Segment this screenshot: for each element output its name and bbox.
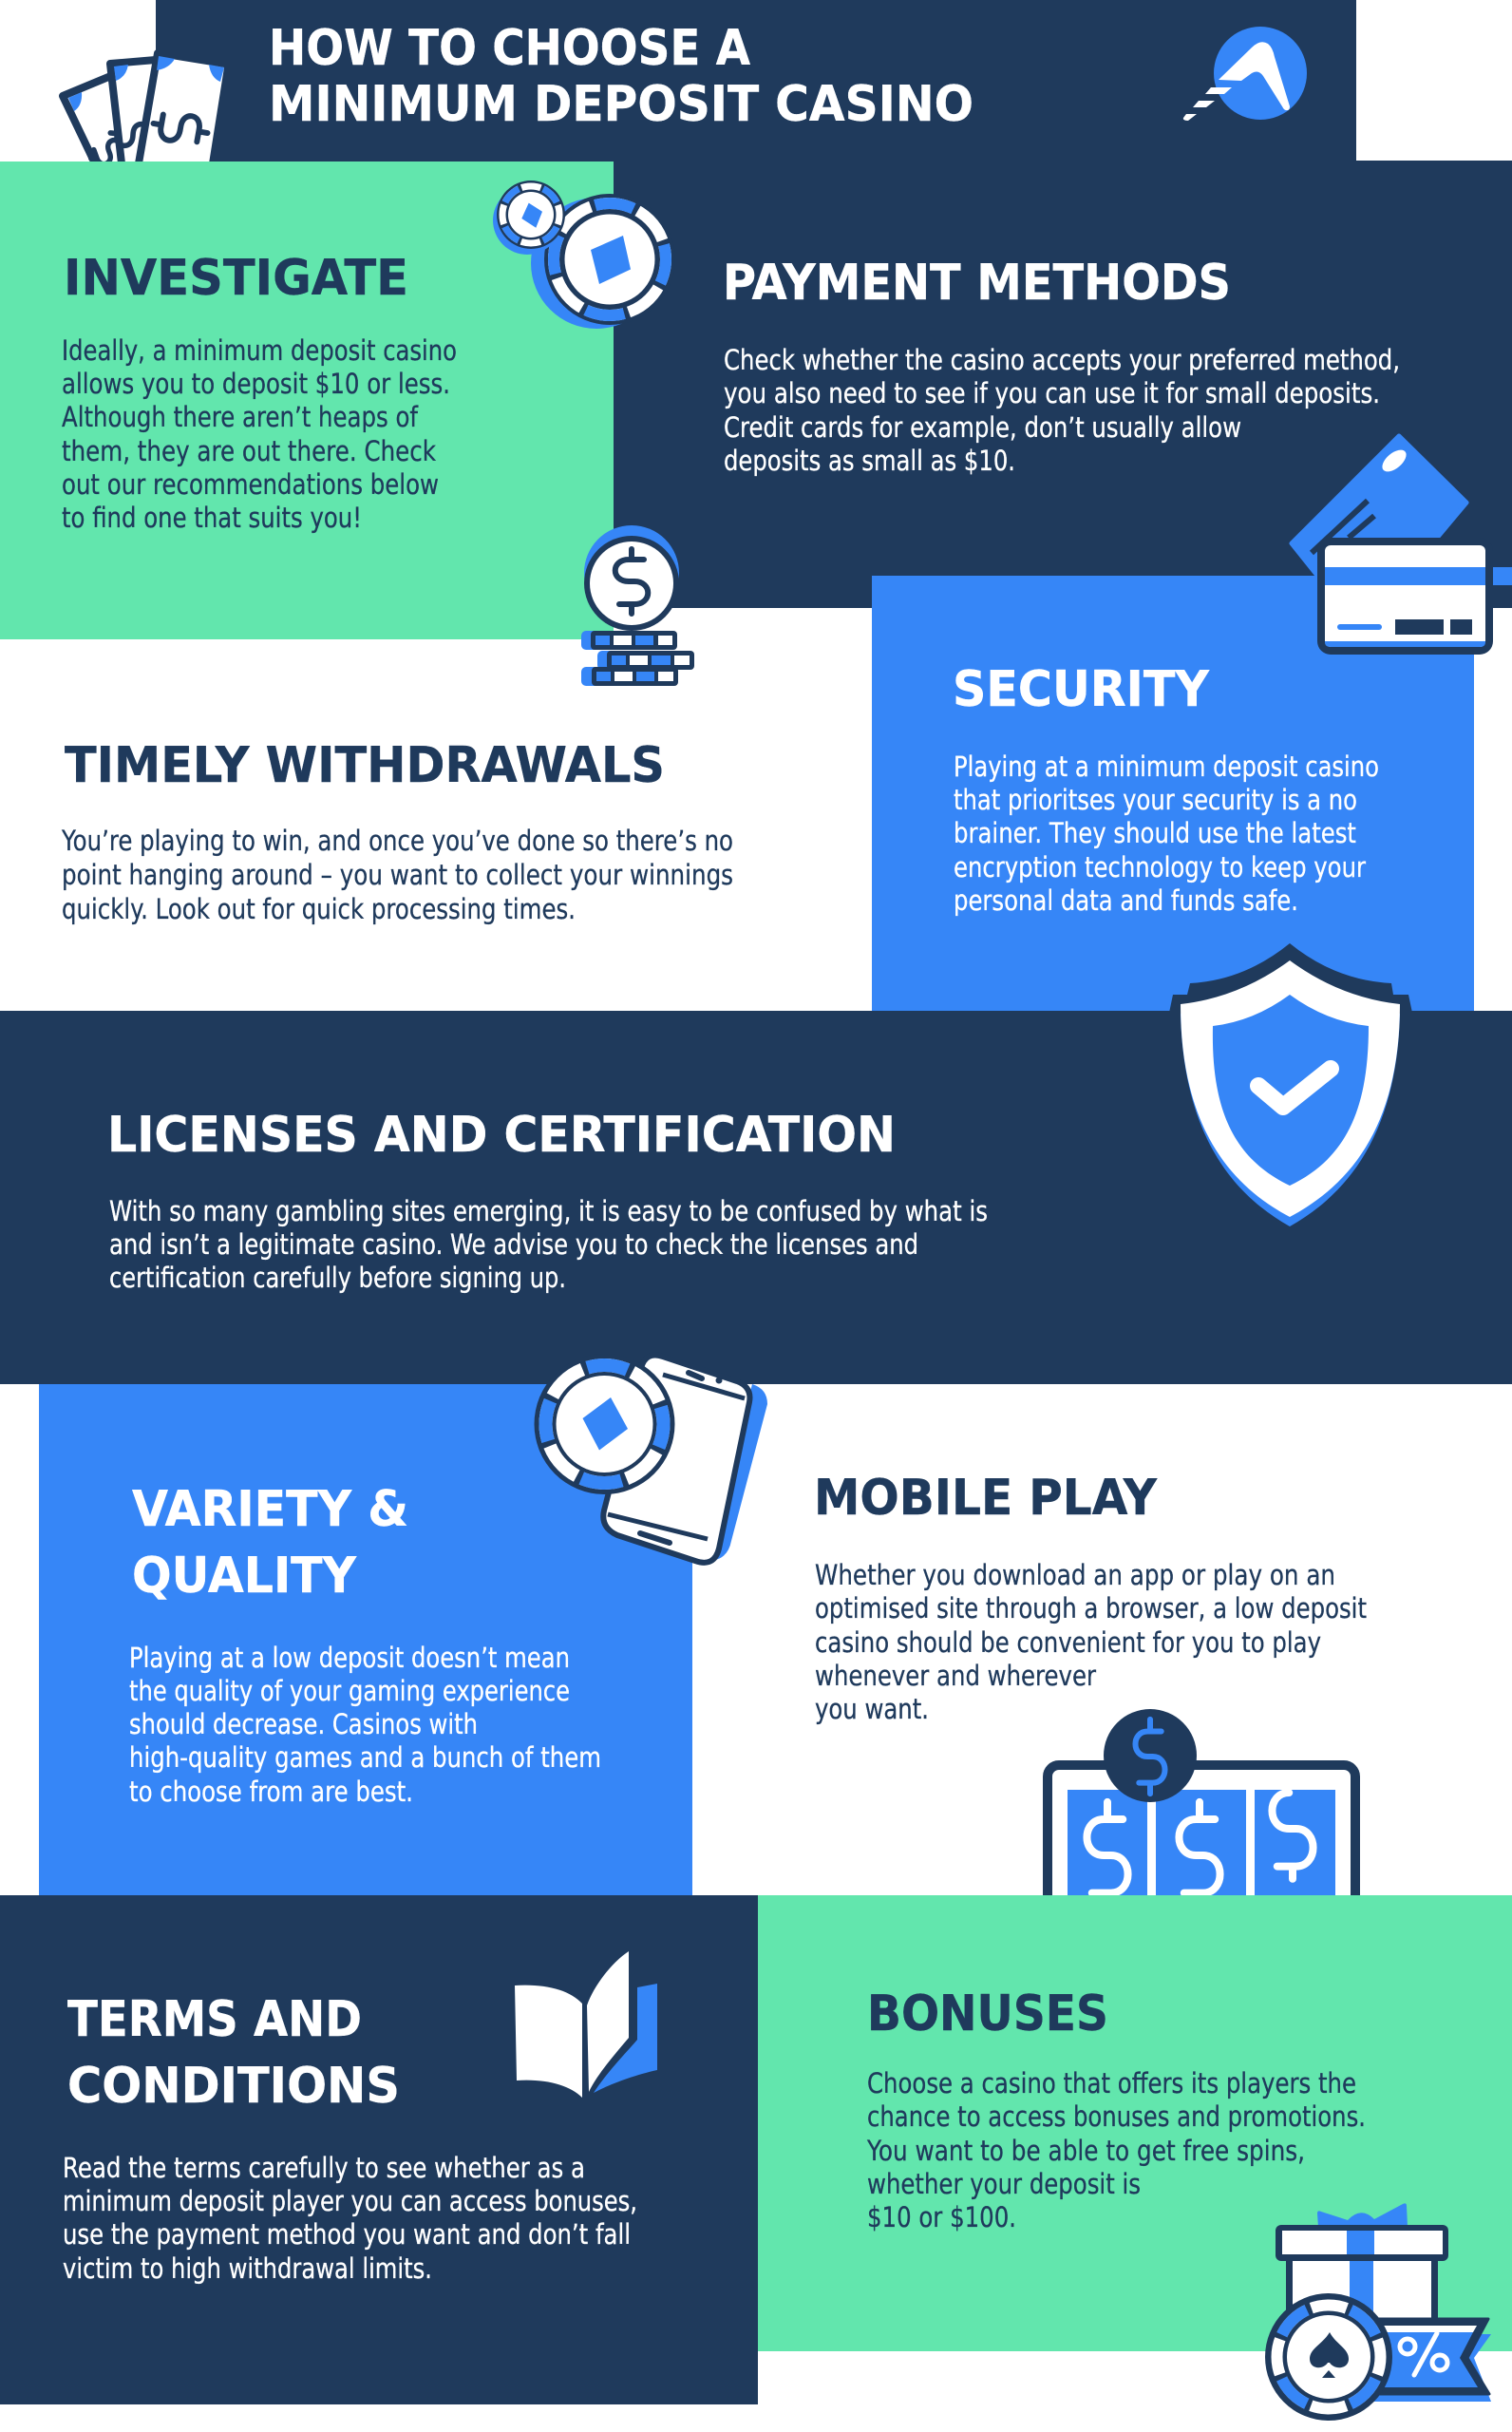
text: timely withdrawals body: point hanging around – you want to collect your winnings <box>62 859 733 891</box>
text: investigate body: to find one that suits you! <box>62 502 362 534</box>
text: terms body: minimum deposit player you can access bonuses, <box>63 2185 637 2217</box>
icon: spade chip <box>1261 2290 1396 2424</box>
text: payment methods body: Credit cards for example, don’t usually allow <box>724 411 1241 444</box>
icon: banknotes <box>63 53 224 168</box>
panel: bonuses <box>758 1895 1512 2351</box>
heading: security: SECURITY <box>953 661 1210 718</box>
icon: chip on phone <box>529 1349 680 1499</box>
text: mobile play body: casino should be convenient for you to play <box>815 1626 1321 1659</box>
text: investigate body: Ideally, a minimum deposit casino <box>62 334 457 367</box>
heading: variety and quality: QUALITY <box>132 1548 357 1605</box>
text: variety body <box>129 1642 601 1808</box>
text: terms body <box>63 2152 637 2285</box>
panel: licenses and certification <box>0 1011 1512 1384</box>
icon: open book <box>515 1951 657 2098</box>
title <box>269 20 973 133</box>
heading: terms and conditions: CONDITIONS <box>67 2058 400 2115</box>
text: bonuses body: whether your deposit is <box>867 2168 1141 2200</box>
text: bonuses body: chance to access bonuses and promotions. <box>867 2100 1366 2133</box>
panel: variety and quality <box>39 1384 692 1895</box>
text: licenses body <box>109 1195 988 1294</box>
text: bonuses body: You want to be able to get free spins, <box>866 2135 1305 2167</box>
heading: terms and conditions: TERMS AND <box>67 1991 362 2048</box>
icon: slot machine <box>1048 1709 1355 1927</box>
heading: payment methods: PAYMENT METHODS <box>723 255 1231 312</box>
text: terms body: Read the terms carefully to see whether as a <box>63 2152 585 2184</box>
heading: licenses and certification: LICENSES AND CERTIFICATION <box>107 1107 896 1164</box>
icon: shield <box>1169 943 1412 1226</box>
text: payment methods body: deposits as small as $10. <box>724 445 1015 477</box>
text: licenses body: With so many gambling sites emerging, it is easy to be confused by what is <box>109 1195 988 1227</box>
icon: large chip <box>539 189 680 330</box>
text: investigate body: them, they are out there. Check <box>62 435 436 467</box>
text: variety body: the quality of your gaming experience <box>129 1675 570 1707</box>
heading: bonuses: BONUSES <box>867 1986 1108 2042</box>
icon: gift box with chip <box>1261 2203 1491 2424</box>
text: security body: encryption technology to keep your <box>954 851 1366 884</box>
heading: variety and quality <box>132 1481 408 1605</box>
title: HOW TO CHOOSE A <box>269 20 750 77</box>
panel: payment methods <box>614 161 1512 608</box>
text: mobile play body: optimised site through a browser, a low deposit <box>815 1592 1367 1624</box>
text: security body: that prioritses your security is a no <box>954 784 1357 816</box>
icon: small chip <box>494 178 568 252</box>
text: bonuses body: $10 or $100. <box>867 2201 1016 2233</box>
icon: dollar coin and stacks <box>581 525 694 686</box>
title: MINIMUM DEPOSIT CASINO <box>269 76 973 133</box>
icon: logo <box>1183 27 1307 121</box>
text: security body: Playing at a minimum deposit casino <box>954 750 1379 783</box>
text: payment methods body <box>724 344 1400 477</box>
text: investigate body <box>62 334 457 534</box>
text: timely withdrawals body: You’re playing to win, and once you’ve done so there’s no <box>61 825 733 857</box>
text: security body: personal data and funds safe. <box>954 884 1298 917</box>
icon: credit cards <box>1292 436 1512 655</box>
panel: mobile play <box>814 1470 1367 1725</box>
heading: variety and quality: VARIETY & <box>132 1481 408 1538</box>
text: terms body: victim to high withdrawal limits. <box>63 2252 432 2285</box>
text: variety body: high-quality games and a bunch of them <box>129 1741 601 1774</box>
text: terms body: use the payment method you want and don’t fall <box>63 2218 631 2251</box>
header banner <box>156 0 1356 162</box>
icon: phone and chip <box>529 1349 767 1563</box>
icon: discount ribbon <box>1368 2319 1491 2402</box>
heading: timely withdrawals: TIMELY WITHDRAWALS <box>65 737 665 794</box>
panel: terms and conditions <box>0 1895 758 2404</box>
panel: investigate <box>0 162 614 639</box>
text: timely withdrawals body <box>61 825 733 925</box>
text: payment methods body: you also need to see if you can use it for small deposits. <box>724 377 1380 409</box>
text: security body: brainer. They should use the latest <box>954 817 1356 849</box>
heading: mobile play: MOBILE PLAY <box>814 1470 1158 1527</box>
text: timely withdrawals body: quickly. Look out for quick processing times. <box>62 893 576 925</box>
text: licenses body: and isn’t a legitimate casino. We advise you to check the licenses and <box>109 1228 918 1261</box>
heading: investigate: INVESTIGATE <box>64 250 408 307</box>
text: variety body: Playing at a low deposit doesn’t mean <box>129 1642 570 1674</box>
panel: timely withdrawals <box>61 737 733 925</box>
panel: security <box>872 576 1474 1013</box>
text: investigate body: Although there aren’t heaps of <box>62 401 419 433</box>
text: variety body: to choose from are best. <box>129 1776 413 1808</box>
text: mobile play body <box>815 1559 1367 1725</box>
icon: casino chips <box>493 178 680 330</box>
text: bonuses body <box>866 2067 1366 2233</box>
text: mobile play body: whenever and wherever <box>815 1660 1096 1692</box>
text: licenses body: certification carefully before signing up. <box>109 1262 566 1294</box>
text: payment methods body: Check whether the casino accepts your preferred method, <box>724 344 1400 376</box>
text: variety body: should decrease. Casinos with <box>129 1708 478 1740</box>
text: bonuses body: Choose a casino that offers its players the <box>867 2067 1356 2100</box>
text: security body <box>954 750 1379 917</box>
text: mobile play body: you want. <box>815 1693 929 1725</box>
heading: terms and conditions <box>67 1991 400 2115</box>
text: mobile play body: Whether you download an app or play on an <box>815 1559 1335 1591</box>
text: investigate body: allows you to deposit $10 or less. <box>62 368 450 400</box>
text: investigate body: out our recommendations below <box>62 468 439 501</box>
